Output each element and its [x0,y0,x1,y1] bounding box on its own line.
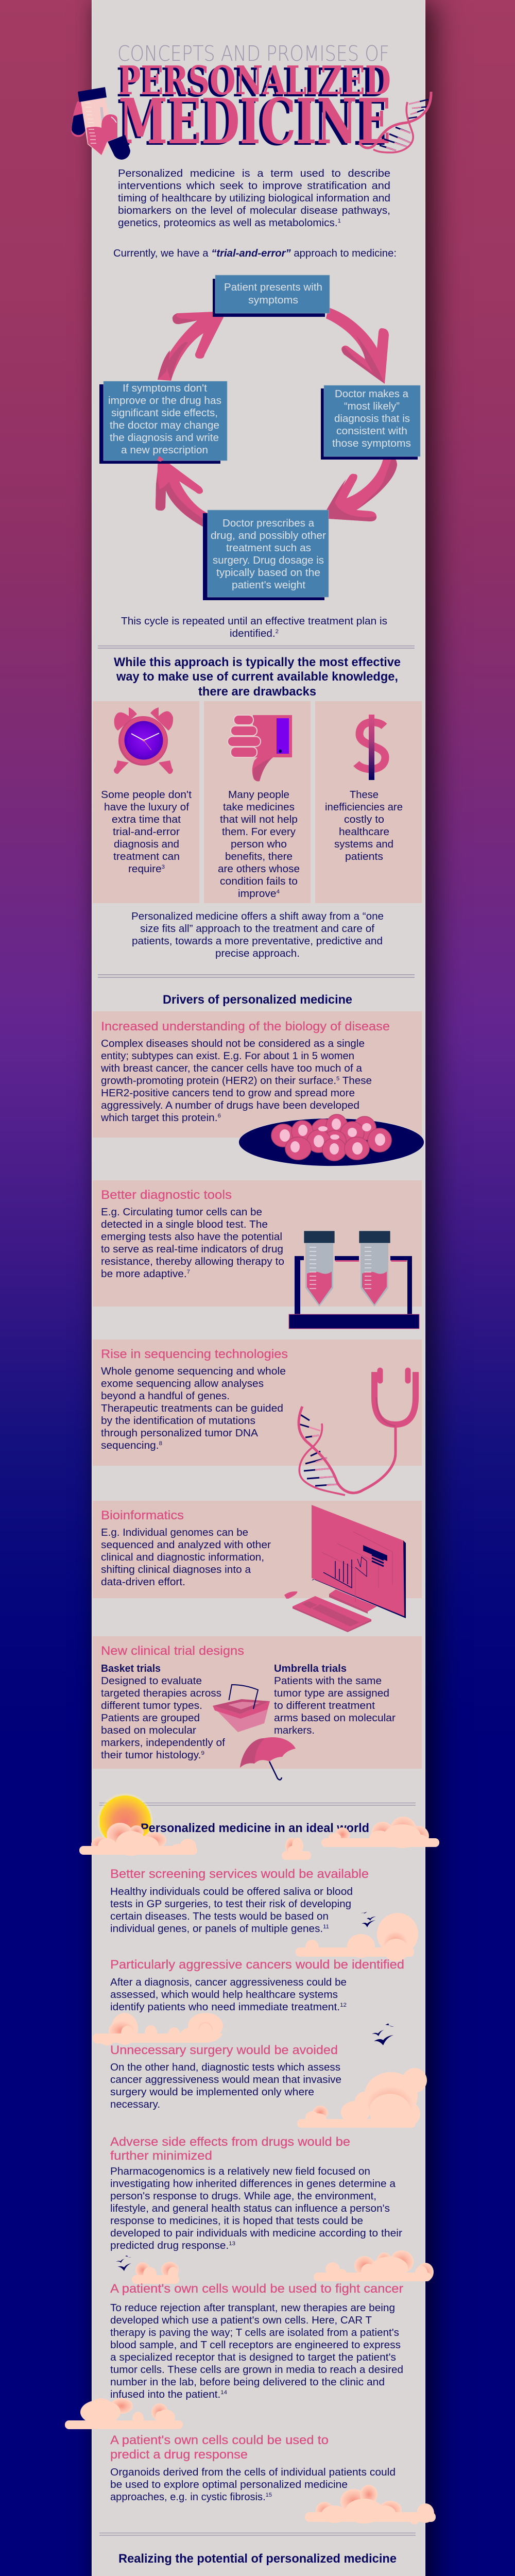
intro paragraph [118,168,390,229]
text: improve [238,888,274,900]
intro paragraph: genetics, proteomics as well as metabolomics. [118,217,330,229]
panel: sequencing: exome sequencing allow analyses [101,1378,264,1389]
text [218,789,300,900]
title line 2: MEDICINE [118,84,391,158]
panel: diagnostic tools [93,1180,422,1329]
cloud right [321,1817,439,1848]
intro paragraph: Personalized medicine is a term used to describe [118,168,390,179]
section: aggressive cancers: assessed, which would help healthcare systems [110,1989,338,2001]
title line 1: PERSONALIZED [116,60,387,106]
intro paragraph: interventions which seek to improve stratification and [118,180,390,192]
step: doctor prescribes: typically based on the [216,567,320,579]
icon: computer with charts [284,1505,406,1632]
basket trials text: targeted therapies across [101,1688,221,1699]
section: adverse side effects: predicted drug response. [110,2240,224,2251]
icon: alarm clock [114,707,173,774]
step: symptoms do not improve: If symptoms don't [123,383,207,394]
panel: biology of disease: 6 [218,1113,221,1119]
intro paragraph: 1 [338,218,341,224]
section: adverse side effects: lifestyle, and general health status can influence a person's [110,2203,390,2214]
text: take medicines [223,802,295,813]
step: patient presents: symptoms [248,295,298,306]
text: have the luxury of [104,802,189,813]
text: costly to [344,814,384,825]
section: adverse side effects: 13 [229,2241,235,2247]
icon: birds [116,2256,131,2271]
umbrella trials text: Umbrella trials [274,1663,347,1674]
text [325,789,403,862]
step: doctor prescribes: drug, and possibly other [211,530,326,541]
section: screening: 11 [323,1924,329,1930]
panel: sequencing: beyond a handful of genes. [101,1391,230,1402]
panel: diagnostic tools: Better diagnostic tools [101,1188,232,1202]
basket trials text: their tumor histology. [101,1750,196,1761]
section: unnecessary surgery: Unnecessary surgery would be avoided [110,2043,338,2057]
section: own cells fight cancer: To reduce rejection after transplant, new therapies are being [110,2302,395,2314]
text: Many people [228,789,289,801]
section: adverse side effects: investigating how inherited differences in genes determine a [110,2178,396,2190]
text: healthcare [339,826,389,838]
ideal world banner [79,1793,439,1860]
personalized medicine shift: Personalized medicine offers a shift away from a “one [131,911,384,922]
text: condition fails to [220,876,298,887]
cycle diagram [99,275,420,600]
panel: bioinformatics: Bioinformatics [101,1509,184,1522]
section: own cells fight cancer: a specialized receptor that is designed to target the patient's [110,2352,396,2363]
section: predict drug response: be used to explore optimal personalized medicine [110,2479,348,2490]
section: screening: certain diseases. The tests would be based on [110,1911,329,1922]
panel: diagnostic tools: E.g. Circulating tumor cells can be [101,1207,262,1218]
personalized medicine shift [131,911,384,959]
text: inefficiencies are [325,802,403,813]
umbrella trials text: arms based on molecular [274,1713,396,1724]
basket trials text: 9 [201,1750,204,1756]
section: predict drug response: A patient's own cells could be used to [110,2433,329,2447]
step: patient presents [213,275,330,317]
cloud small [282,1838,311,1860]
step: symptoms do not improve: the doctor may change [110,420,219,431]
text: These [350,789,379,801]
step: doctor diagnosis: Doctor makes a [335,388,409,400]
section: own cells fight cancer: tumor cells. These cells are grown in media to reach a desired [110,2364,403,2376]
step: doctor diagnosis: those symptoms [332,438,411,449]
section: screening: individual genes, or panels of multiple genes. [110,1923,316,1935]
text: systems and [334,839,393,850]
cloud left [79,1823,197,1856]
step: doctor diagnosis: diagnosis that is [334,413,410,425]
section: aggressive cancers: identify patients who need immediate treatment. [110,2002,329,2013]
section: own cells fight cancer: infused into the patient. [110,2389,217,2400]
section: own cells fight cancer: blood sample, and T cell receptors are engineered to express [110,2340,401,2351]
drivers heading: Drivers of personalized medicine [163,993,352,1007]
panel: drawback cost [315,701,422,903]
intro paragraph: timing of healthcare by utilizing biological information and [118,193,390,204]
section: adverse side effects: developed to pair individuals with medicine according to their [110,2228,402,2239]
panel: biology of disease: HER2-positive cancers tend to grow and spread more [101,1088,355,1099]
cloud [65,2398,183,2429]
text: extra time that [112,814,181,825]
panel: diagnostic tools: be more adaptive. [101,1268,183,1280]
panel: biology of disease: These [339,1075,372,1087]
cycle note: 2 [276,629,279,635]
section: own cells fight cancer: developed which use a patient's own cells. Here, CAR T [110,2315,372,2326]
cloud [296,1913,418,1961]
panel: diagnostic tools: 7 [187,1269,190,1275]
cloud [314,2250,434,2281]
step: doctor prescribes: patient's weight [232,580,305,591]
panel: bioinformatics [93,1501,422,1632]
panel: sequencing: sequencing. [101,1440,157,1451]
panel: bioinformatics: clinical and diagnostic information, [101,1552,264,1563]
panel: bioinformatics: E.g. Individual genomes can be [101,1527,248,1538]
text: are others whose [218,863,300,875]
section: predict drug response: approaches, e.g. in cystic fibrosis. [110,2492,265,2503]
icon: DNA helix [359,92,431,152]
umbrella trials text: Patients with the same [274,1675,382,1687]
basket trials text: Patients are grouped [101,1713,200,1724]
icon: stethoscope and DNA [299,1370,416,1495]
section: own cells fight cancer [110,2282,403,2400]
panel: biology of disease: growth-promoting protein (HER2) on their surface. [101,1075,330,1087]
panel: diagnostic tools: to serve as real-time indicators of drug [101,1244,283,1255]
text: them. For every [222,826,296,838]
panel: diagnostic tools: emerging tests also have the potential [101,1231,282,1243]
section: screening: Better screening services would be available [110,1867,369,1881]
realizing heading: Realizing the potential of personalized medicine [118,2552,397,2566]
section: own cells fight cancer: therapy is paving the way; T cells are isolated from a patient's [110,2327,399,2338]
step: symptoms do not improve: significant side effects, [111,408,218,419]
panel: biology of disease: Complex diseases should not be considered as a single [101,1038,365,1049]
panel: biology of disease: 5 [336,1076,339,1082]
icon: thumbs down [228,715,292,781]
step: symptoms do not improve: a new prescription [121,445,208,456]
panel: sequencing [93,1340,422,1495]
umbrella trials text: tumor type are assigned [274,1688,389,1699]
arrow: prescription to reassessment [156,456,208,529]
basket trials text: Basket trials [101,1663,161,1674]
panel: biology of disease: which target this protein. [101,1112,213,1124]
section: unnecessary surgery [110,2043,341,2110]
umbrella trials text [274,1663,396,1736]
section: unnecessary surgery: necessary. [110,2099,160,2110]
panel: sequencing: Whole genome sequencing and whole [101,1366,286,1377]
section: aggressive cancers: After a diagnosis, cancer aggressiveness could be [110,1977,347,1988]
section: unnecessary surgery: cancer aggressiveness would mean that invasive [110,2074,341,2086]
panel: biology of disease: entity; subtypes can exist. E.g. For about 1 in 5 women [101,1050,354,1062]
section: predict drug response [110,2433,396,2503]
trial and error sentence: Currently, we have a “trial-and-error” approach to medicine: [113,248,397,259]
arrow: diagnosis to prescription [321,457,397,521]
text: 3 [162,864,165,870]
step: doctor diagnosis: “most likely” [344,401,400,412]
panel: sequencing: through personalized tumor DNA [101,1428,259,1439]
section: adverse side effects: Adverse side effects from drugs would be [110,2135,350,2149]
step: doctor prescribes: surgery. Drug dosage is [213,555,324,566]
cloud small [132,2262,179,2284]
title line 1: PERSONALIZED [118,58,391,104]
drawbacks heading: way to make use of current available knowledge, [116,670,398,684]
cloud [297,2068,427,2128]
icon: birds [360,1912,376,1927]
panel: biology of disease: Increased understanding of the biology of disease [101,1020,390,1033]
icon: birds [372,2023,394,2045]
umbrella trials text: to different treatment [274,1700,375,1711]
basket trials text [101,1663,225,1761]
umbrella trials text: markers. [274,1725,315,1736]
section: adverse side effects: further minimized [110,2149,212,2163]
cycle note [121,616,387,639]
text: trial-and-error [113,826,180,838]
section: aggressive cancers: 12 [340,2002,347,2008]
drawbacks heading: While this approach is typically the most effective [114,655,401,669]
section: adverse side effects: person's response to drugs. While age, the environment, [110,2191,376,2202]
icon: dollar sign [356,715,385,780]
step: doctor diagnosis [321,385,420,460]
section: unnecessary surgery: On the other hand, diagnostic tests which assess [110,2062,340,2073]
icon: test tube, capsules and heart [71,87,130,160]
text: require [128,863,160,875]
section: unnecessary surgery: surgery would be implemented only where [110,2087,314,2098]
step: symptoms do not improve: improve or the drug has [108,395,221,406]
heading: Personalized medicine in an ideal world [141,1821,369,1835]
panel: diagnostic tools: resistance, thereby allowing therapy to [101,1256,284,1267]
section: adverse side effects: response to medicines, it is hoped that tests could be [110,2215,363,2227]
overlap of reassessment arrow tip on box [157,456,164,462]
header title [116,41,391,160]
section: own cells fight cancer: A patient's own cells would be used to fight cancer [110,2282,403,2296]
arrow: reassessment to symptoms [158,311,227,381]
title line 2: MEDICINE [116,86,387,160]
panel: drawback time [93,701,199,903]
panel: clinical trial designs: New clinical trial designs [101,1644,244,1658]
section: aggressive cancers [110,1958,404,2013]
section: predict drug response: Organoids derived from the cells of individual patients could [110,2467,396,2478]
basket trials text: based on molecular [101,1725,196,1736]
icon: test tubes in rack [289,1231,419,1329]
step: doctor prescribes: Doctor prescribes a [222,518,315,529]
personalized medicine shift: size fits all” approach to the treatment and care of [140,923,374,935]
personalized medicine shift: precise approach. [215,948,300,959]
text: that will not help [220,814,298,825]
basket trials text: markers, independently of [101,1737,225,1749]
cycle note: This cycle is repeated until an effective treatment plan is [121,616,387,627]
subtitle: CONCEPTS AND PROMISES OF [117,41,389,66]
basket trials text: Designed to evaluate [101,1675,202,1687]
panel: biology of disease: with breast cancer, the cancer cells have too much of a [100,1063,363,1074]
drawbacks heading: there are drawbacks [198,685,316,699]
step: symptoms do not improve [99,381,227,464]
panel: bioinformatics: data-driven effort. [101,1577,185,1588]
text: treatment can [113,851,180,862]
section: screening: Healthy individuals could be offered saliva or blood [110,1886,353,1897]
section: adverse side effects: Pharmacogenomics is a relatively new field focused on [110,2166,370,2177]
step: patient presents: Patient presents with [224,282,322,293]
text: 4 [277,889,280,895]
text: patients [345,851,383,862]
section: own cells fight cancer: number in the lab, before being delivered to the clinic and [110,2377,385,2388]
step: doctor prescribes: treatment such as [226,543,311,554]
panel: bioinformatics: shifting clinical diagnoses into a [101,1564,251,1575]
arrow: symptoms to diagnosis [326,308,389,384]
panel: sequencing: Rise in sequencing technologies [101,1347,288,1361]
panel: sequencing: by the identification of mutations [101,1415,255,1427]
icon: umbrella [240,1737,296,1780]
icon: sun [97,1793,153,1849]
panel: biology of disease [93,1011,424,1166]
icon: cells in petri dish [239,1114,424,1166]
panel: clinical trial designs [93,1636,422,1780]
panel: sequencing: 8 [159,1440,162,1447]
section: predict drug response: predict a drug response [110,2448,248,2462]
step: symptoms do not improve: the diagnosis and write [110,432,219,444]
white content panel [92,0,425,2576]
intro paragraph: biomarkers on the level of molecular disease pathways, [118,205,390,216]
text: Some people don't [101,789,192,801]
step: doctor prescribes [203,510,329,600]
personalized medicine shift: patients, towards a more preventative, predictive and [132,936,383,947]
text [101,789,192,875]
panel: bioinformatics: sequenced and analyzed with other [101,1539,271,1551]
panel: drawback medicines [204,701,311,903]
section: aggressive cancers: Particularly aggressive cancers would be identified [110,1958,404,1972]
text: person who [231,839,287,850]
cloud [93,2013,223,2045]
section: screening [110,1867,369,1935]
section: adverse side effects [110,2135,402,2251]
section: own cells fight cancer: 14 [220,2389,227,2396]
basket trials text: different tumor types. [101,1700,202,1711]
text: benefits, there [225,851,293,862]
drawbacks heading [114,655,401,699]
cycle note: identified. [230,628,274,639]
step: doctor diagnosis: consistent with [336,426,407,437]
panel: biology of disease: aggressively. A number of drugs have been developed [101,1100,359,1111]
cloud [305,2485,436,2524]
panel: diagnostic tools: detected in a single blood test. The [101,1219,268,1230]
section: predict drug response: 15 [266,2492,272,2498]
section: screening: tests in GP surgeries, to test their risk of developing [110,1899,351,1910]
text: diagnosis and [114,839,179,850]
panel: sequencing: Therapeutic treatments can be guided [101,1403,283,1414]
icon: basket [213,1685,270,1732]
